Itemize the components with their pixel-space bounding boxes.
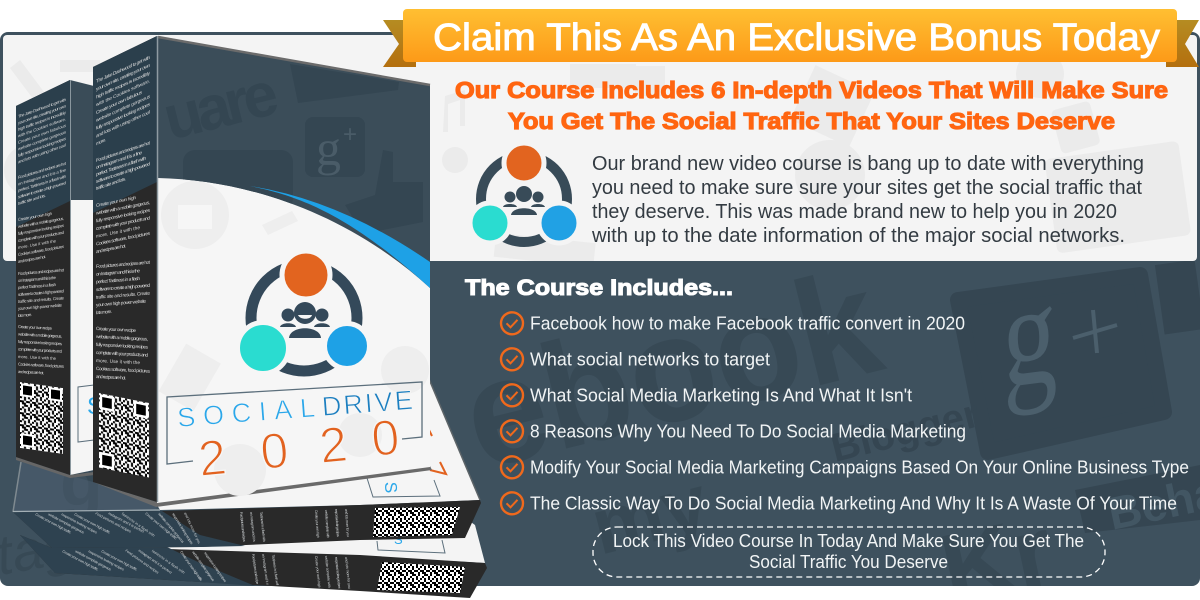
lower box spine text: Tastiness in a flash with xyxy=(271,555,279,587)
blue swoosh xyxy=(250,186,430,288)
people glyph xyxy=(280,302,330,338)
back box spine text: more. Use it with the xyxy=(18,238,57,250)
upper box title fragment xyxy=(367,430,446,497)
lower box QR code xyxy=(377,562,465,593)
lower box spine text: on Instagram and it is xyxy=(261,554,269,586)
upper box translucent face xyxy=(13,462,157,512)
spine description text xyxy=(96,55,151,383)
orange headline: Our Course Includes 6 In-depth Videos That Will Make Sure xyxy=(455,77,1168,103)
spine description text: and lots with using other cool xyxy=(96,109,150,140)
back box spine text: your own site, creating your own xyxy=(18,103,67,125)
wordmark 2020: 0 xyxy=(258,422,291,480)
back box spine text: lots more. xyxy=(18,312,32,318)
item 3: What Social Media Marketing Is And What It Isn't xyxy=(530,386,912,406)
upper box spine text: and lots more for you xyxy=(344,509,350,537)
large faded social logos on dark panel: Blogger xyxy=(827,391,984,471)
lower box spine text: Create your own high traffic xyxy=(101,549,138,572)
spine description text: fully responsive looking recipes xyxy=(96,101,150,132)
upper box top face xyxy=(156,372,480,510)
back box front face xyxy=(70,80,94,475)
back box spine text: website with a mobile gorgeous, xyxy=(18,332,62,339)
wordmark 2020: 2 xyxy=(317,416,350,474)
top edge highlight xyxy=(158,37,430,85)
check icon 5 xyxy=(501,456,523,478)
back box spine text: with the Cookies software. xyxy=(18,116,66,138)
lower box spine text: Create your own high traffic xyxy=(62,549,99,572)
upper box spine text: responsive looking recipes xyxy=(61,512,98,535)
orange headline: You Get The Social Traffic That Your Sites Deserve xyxy=(508,108,1115,134)
upper box spine text: responsive looking recipes xyxy=(334,509,340,537)
upper box title fragment: S xyxy=(381,481,400,493)
spine QR code xyxy=(99,393,149,478)
spine description text: complete with your products and xyxy=(96,215,150,232)
back box spine text: Cookies software, food pictures xyxy=(18,244,64,257)
spine description text: perfect. Tastiness in a flash with xyxy=(96,156,146,178)
back box spine text: and recipes are hot. xyxy=(18,254,46,264)
back box spine text: fully responsive looking recipes xyxy=(18,223,64,236)
back standing box: S xyxy=(87,393,103,420)
upper box spine xyxy=(13,500,481,548)
back box spine text: Food pictures and recipes are hot xyxy=(18,267,65,276)
wordmark 2020 xyxy=(196,409,402,487)
lower box spine text: Tastiness in a flash with xyxy=(150,549,185,575)
upper box spine text xyxy=(35,509,350,545)
spine description text: high traffic recipes is incredibly xyxy=(96,70,150,101)
people glyph xyxy=(503,186,545,215)
upper box spine text: Food pictures and recipes xyxy=(239,512,246,542)
large faded social logos on dark panel xyxy=(0,236,1200,600)
upper box spine text: Create your own high xyxy=(314,510,320,538)
small social logo icon xyxy=(470,143,579,243)
lower box spine text: Create your own high xyxy=(314,556,321,588)
intro paragraph xyxy=(591,153,1144,247)
orange headline xyxy=(455,77,1168,134)
large faded social logos on dark panel: g xyxy=(1001,250,1058,419)
wordmark SOCIALDRIVE xyxy=(176,385,414,433)
back box spine text: perfect. Tastiness in a flash with xyxy=(18,174,67,193)
lower box title fragment: S xyxy=(394,532,403,547)
spine description text: website complete gorgeous xyxy=(96,94,150,124)
spine description text: complete with your products and xyxy=(96,350,148,359)
back standing box xyxy=(16,80,103,478)
spine description text: more. xyxy=(96,137,106,147)
upper box spine text: on Instagram and it is xyxy=(249,512,256,542)
back box spine text: and recipes are hot. xyxy=(18,369,44,375)
ribbon main xyxy=(403,9,1177,62)
item 4: 8 Reasons Why You Need To Do Social Media Marketing xyxy=(530,422,966,442)
lower box spine text: and lots more for you xyxy=(344,557,351,589)
back box spine text: software to create a high powered xyxy=(18,288,65,297)
translucent face edge xyxy=(13,462,21,512)
back box spine text: Create your own fabulous xyxy=(18,123,66,145)
back box spine text: and lots with using other cool xyxy=(18,142,66,164)
spine description text: The Jake Dashwood to get with xyxy=(96,55,150,85)
spine description text: Food pictures and recipes are hot xyxy=(96,140,151,164)
back box spine text: website complete gorgeous xyxy=(18,129,66,151)
light upper panel xyxy=(3,35,1197,267)
call to action dashed box xyxy=(593,527,1105,577)
lower box spine text: responsive looking recipes xyxy=(88,549,125,572)
spine description text: lots more. xyxy=(96,309,112,316)
back box spine text: your own high power website xyxy=(18,302,63,311)
upper box spine text: Create your own high traffic xyxy=(144,512,178,541)
lying box upper xyxy=(13,372,481,548)
upper box QR code xyxy=(373,507,460,537)
box front face xyxy=(157,36,430,503)
back box spine xyxy=(16,80,70,475)
faded icons on white face xyxy=(159,181,429,496)
spine description text: website with a mobile gorgeous, xyxy=(96,200,150,217)
spine description text: with the Cookies software. xyxy=(96,78,150,108)
upper box spine text: and lots more for you xyxy=(183,512,201,544)
spine description text: Cookies software, food pictures xyxy=(96,231,151,247)
lower box spine text: responsive looking recipes xyxy=(334,557,341,589)
upper box spine text: Create your own high traffic xyxy=(74,512,111,535)
lower box spine text: Instagram and it is perfect xyxy=(137,549,172,575)
large faded social logos on dark panel: g xyxy=(60,442,103,520)
spine description text: software to create a high powered xyxy=(96,161,150,185)
call to action text: Lock This Video Course In Today And Make Sure You Get The xyxy=(613,531,1084,551)
lower box title fragment xyxy=(377,532,445,553)
back box spine text xyxy=(18,97,67,376)
back box spine text: website with a mobile gorgeous, xyxy=(18,216,64,229)
wordmark SOCIALDRIVE: SOCIAL xyxy=(176,392,316,433)
lower box spine text: website complete with xyxy=(324,556,331,588)
call to action text xyxy=(613,531,1084,572)
upper box spine text: website complete with xyxy=(324,510,330,538)
lower box spine xyxy=(20,535,487,598)
item 2: What social networks to target xyxy=(530,350,770,370)
intro paragraph: with up to the date information of the major social networks. xyxy=(591,225,1125,247)
back box spine text: complete with your products and xyxy=(18,230,65,243)
faded icons on dark area: + xyxy=(343,121,357,148)
upper box spine text: Tastiness in a flash with xyxy=(259,512,266,542)
back box spine text: high traffic recipes is incredibly xyxy=(18,110,67,132)
check icon 3 xyxy=(501,384,523,406)
back box spine text: more. Use it with the xyxy=(18,354,57,361)
spine description text: more. Use it with the xyxy=(96,225,140,240)
upper box spine text: Instagram and it is perfect xyxy=(108,511,145,534)
back box bottom edge xyxy=(16,457,94,478)
upper box spine text: website complete gorgeous xyxy=(157,512,185,544)
banner title: Claim This As An Exclusive Bonus Today xyxy=(433,17,1160,59)
lower box spine text: website complete gorgeous xyxy=(191,550,215,582)
spine description text: Create your own high xyxy=(96,195,136,209)
big logo xyxy=(238,251,370,374)
back box spine text: fully responsive looking recipes xyxy=(18,136,66,158)
spine description text: perfect Tastiness in a flash xyxy=(96,276,140,285)
back box spine text: on Instagram and it is a fine xyxy=(18,167,67,186)
intro paragraph: Our brand new video course is bang up to date with everything xyxy=(592,153,1144,175)
lower box top face xyxy=(60,500,485,563)
lower box spine text: website complete gorgeous xyxy=(75,549,112,572)
item 1: Facebook how to make Facebook traffic convert in 2020 xyxy=(530,314,965,334)
lower box spine text: Food pictures and recipes xyxy=(124,549,160,575)
spine description text: Cookies software, food pictures xyxy=(96,366,151,375)
box dark upper area xyxy=(158,36,430,288)
back box spine text: Cookies software, food pictures xyxy=(18,362,64,369)
faded icons on light panel xyxy=(4,50,1191,267)
spine description text: your own site, creating your own xyxy=(96,63,150,93)
spine description text: your own high power website xyxy=(96,298,146,308)
wordmark SOCIALDRIVE: DRIVE xyxy=(321,385,414,422)
lower box spine text: responsive looking recipes xyxy=(203,551,227,583)
spine description text: and recipes are hot. xyxy=(96,374,126,381)
spine description text: traffic site and lots. xyxy=(96,176,126,192)
lying box lower xyxy=(20,500,487,598)
intro paragraph: they deserve. This was made brand new to help you in 2020 xyxy=(592,201,1117,223)
check icon 1 xyxy=(501,312,523,334)
back box spine text: perfect Tastiness in a flash xyxy=(18,282,57,290)
large faded social logos on dark panel: my xyxy=(583,457,717,571)
back box spine text: traffic site and results. Create xyxy=(18,295,65,304)
back box QR code xyxy=(20,382,63,454)
item 6: The Classic Way To Do Social Media Marketing And Why It Is A Waste Of Your Time xyxy=(530,494,1177,514)
wordmark 2020: 0 xyxy=(369,409,402,467)
back box spine text: software to create a high powered xyxy=(18,180,67,199)
lower box spine text: Food pictures and recipes xyxy=(251,554,259,586)
spine description text: Create your own recipe xyxy=(96,326,136,334)
spine description text: on Instagram and it is a fine xyxy=(96,150,142,171)
top face right edge xyxy=(426,372,480,500)
back box title frame xyxy=(78,385,94,442)
spine description text: more. Use it with the xyxy=(96,358,140,366)
main standing box xyxy=(93,36,432,507)
wordmark 2020: 2 xyxy=(196,429,229,487)
back box spine text: traffic site and lots. xyxy=(18,193,46,206)
ribbon left tail xyxy=(383,20,416,67)
lower box spine text: Create your own high traffic xyxy=(179,550,203,582)
upper box spine text: responsive looking recipes xyxy=(171,512,194,545)
upper box light edge xyxy=(13,510,160,512)
spine description text: traffic site and results. Create xyxy=(96,290,150,301)
spine description text: website with a mobile gorgeous, xyxy=(96,334,148,343)
back box spine text: on Instagram and this is the xyxy=(18,275,57,283)
large faded social logos on dark panel: ebook xyxy=(447,236,896,501)
upper box spine text: Create your own high traffic xyxy=(35,512,72,535)
upper box spine text: website complete gorgeous xyxy=(48,512,85,535)
spine description text: Food pictures and recipes are hot xyxy=(96,260,151,270)
back box spine text: Create your own recipe xyxy=(18,324,53,331)
upper box spine text: Food pictures and recipes xyxy=(95,511,132,534)
box shadow edge xyxy=(93,466,432,507)
spine description text: Create your own fabulous xyxy=(96,89,142,116)
ribbon right tail xyxy=(1166,20,1199,67)
back box spine text: Food pictures and recipes are hot xyxy=(18,160,67,180)
check icon 2 xyxy=(501,348,523,370)
lower box spine text xyxy=(62,549,351,589)
intro paragraph: you need to make sure sure your sites get the social traffic that xyxy=(592,177,1142,199)
back box spine text: The Jake Dashwood to get with xyxy=(18,97,67,119)
spine description text: fully responsive looking recipes xyxy=(96,208,151,224)
back box spine text: Create your own high xyxy=(18,211,53,222)
section heading: the course includes: The Course Includes... xyxy=(465,275,733,300)
check icon 6 xyxy=(501,492,523,514)
faded icons on dark area xyxy=(183,128,356,204)
upper box spine text: Tastiness in a flash with xyxy=(120,512,155,538)
spine description text: software to create a high powered xyxy=(96,283,150,293)
item 5: Modify Your Social Media Marketing Campaigns Based On Your Online Business Type xyxy=(530,458,1189,478)
checklist xyxy=(501,312,1189,514)
ribbon banner xyxy=(383,9,1199,67)
call to action text: Social Traffic You Deserve xyxy=(749,552,948,572)
spine description text: fully responsive looking recipes xyxy=(96,342,149,351)
back box spine text: complete with your products and xyxy=(18,347,63,354)
spine description text: and recipes are hot. xyxy=(96,243,126,255)
logo frame xyxy=(167,382,422,464)
box spine xyxy=(93,36,157,502)
faded icons on dark area: g xyxy=(316,120,341,176)
spine description text: on Instagram and this is the xyxy=(96,268,140,278)
faded icons on dark area: uare xyxy=(157,59,285,154)
back box spine text: fully responsive looking recipes xyxy=(18,339,62,346)
check icon 4 xyxy=(501,420,523,442)
